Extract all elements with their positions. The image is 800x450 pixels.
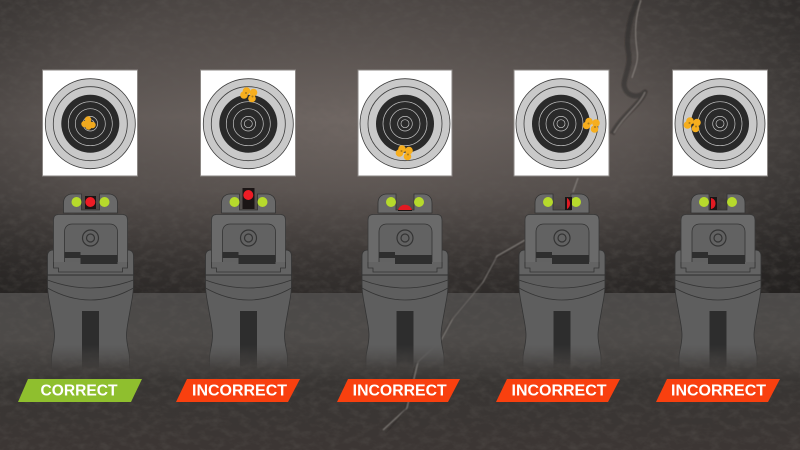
label: correct xyxy=(18,379,142,402)
label: incorrect 3 xyxy=(496,379,620,402)
target 5: left group xyxy=(672,70,768,176)
label: incorrect 1: INCORRECT xyxy=(192,382,288,400)
pistol 4: front sight right xyxy=(519,194,605,372)
bullet holes: tight group xyxy=(81,116,96,130)
target 2: high group xyxy=(200,70,296,176)
label: incorrect 2: INCORRECT xyxy=(353,382,447,400)
target 3: low group xyxy=(358,70,452,176)
label: correct: CORRECT xyxy=(40,382,118,400)
pistol 3: front sight low xyxy=(362,194,448,372)
pistol 5: front sight left xyxy=(675,194,761,372)
pistol 1: front sight centered xyxy=(48,194,134,372)
label: incorrect 3: INCORRECT xyxy=(512,382,607,400)
wall crack xyxy=(383,0,645,432)
label: incorrect 4: INCORRECT xyxy=(671,382,767,400)
target 4: right group xyxy=(514,70,609,176)
label: incorrect 2 xyxy=(337,379,460,402)
target 1: centered group xyxy=(42,70,138,176)
label: incorrect 1 xyxy=(176,379,300,402)
background: concrete wall xyxy=(0,0,800,294)
background: floor xyxy=(0,293,800,450)
label: incorrect 4 xyxy=(656,379,780,402)
pistol 2: front sight high xyxy=(206,188,292,372)
